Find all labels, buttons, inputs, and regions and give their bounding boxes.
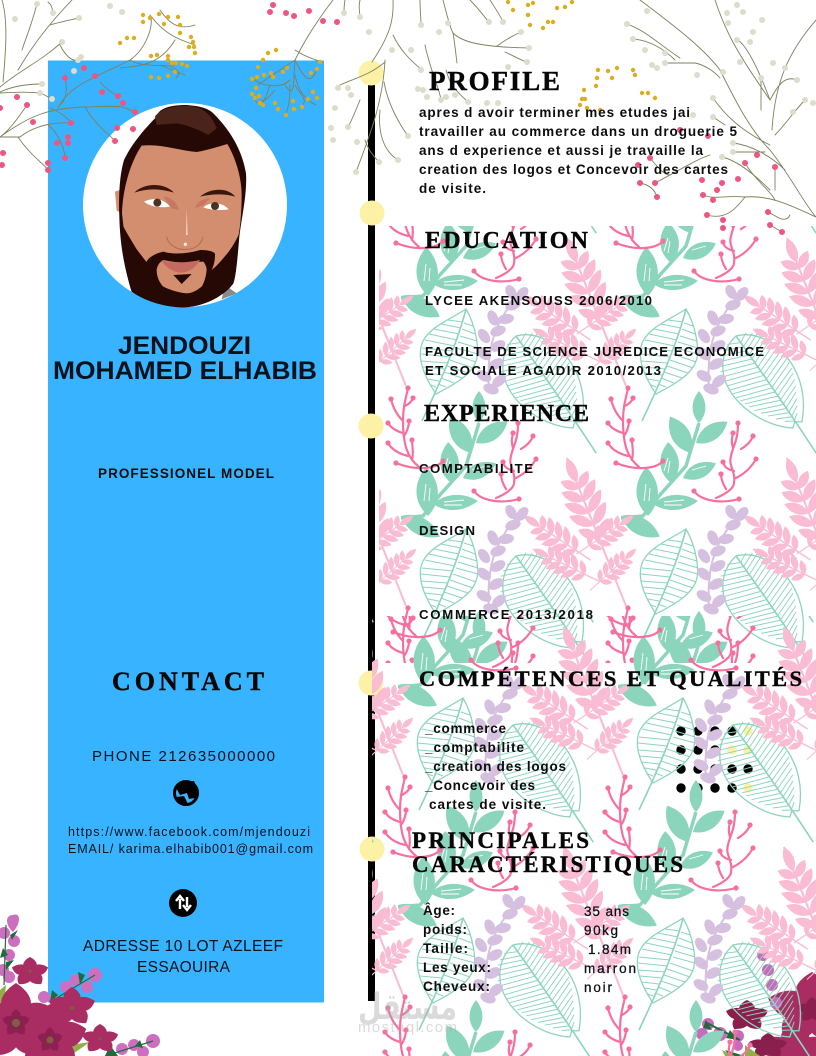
profile text: travailler au commerce dans un droguerie 5 [419, 124, 737, 139]
characteristics labels [423, 903, 491, 994]
contact: phone: PHONE 212635000000 [92, 748, 275, 765]
heading: profile: PROFILE [429, 66, 560, 96]
dot grid decoration [681, 731, 748, 788]
experience entries: COMPTABILITE [419, 461, 533, 476]
contact: address: ADRESSE 10 LOT AZLEEF [83, 938, 283, 955]
skills list [424, 721, 566, 812]
heading: skills: COMPÉTENCES ET QUALITÉS [419, 666, 802, 691]
name: MOHAMED ELHABIB [53, 357, 317, 385]
watermark: مستقل [358, 987, 457, 1028]
heading: key characteristics: CARACTÉRISTIQUES [412, 852, 683, 877]
characteristics labels: poids: [423, 922, 467, 937]
profile text: ans d experience et aussi je travaille la [419, 143, 703, 158]
icon: globe [174, 781, 198, 805]
contact: address [83, 938, 283, 976]
experience entries: DESIGN [419, 523, 475, 538]
watermark [358, 987, 457, 1036]
experience entries: COMMERCE 2013/2018 [419, 607, 593, 622]
profile text [419, 105, 737, 196]
botanical branches: top [0, 0, 816, 232]
characteristics values [584, 904, 636, 995]
portrait photo illustration [83, 103, 287, 307]
heading: contact: CONTACT [112, 667, 264, 696]
heading: key characteristics: PRINCIPALES [412, 828, 589, 853]
skills list: cartes de visite. [429, 797, 546, 812]
characteristics values: 90kg [584, 923, 618, 938]
characteristics labels: Cheveux: [423, 979, 490, 994]
education entries: ET SOCIALE AGADIR 2010/2013 [425, 363, 661, 378]
characteristics labels: Âge: [423, 903, 455, 918]
flowers: bottom left [0, 900, 180, 1056]
heading: key characteristics [412, 828, 683, 877]
skills list: _commerce [424, 721, 506, 736]
panel: blue sidebar [48, 60, 324, 1002]
skills list: _creation des logos [424, 759, 566, 774]
characteristics values: marron [584, 961, 636, 976]
characteristics labels: Taille: [423, 941, 468, 956]
contact: address: ESSAOUIRA [137, 959, 231, 976]
characteristics values: noir [584, 980, 612, 995]
contact: web and email [68, 825, 313, 856]
name: JENDOUZI [118, 332, 251, 360]
education entries: FACULTE DE SCIENCE JUREDICE ECONOMICE [425, 344, 764, 359]
characteristics values: 1.84m [588, 942, 631, 957]
contact: web and email: EMAIL/ karima.elhabib001@gmail.com [68, 842, 313, 856]
watermark: mostaql.com [358, 1019, 457, 1036]
timeline dots [358, 60, 384, 862]
icon: swap arrows [169, 889, 197, 917]
profile text: de visite. [419, 181, 486, 196]
flowers: bottom right [690, 940, 816, 1056]
heading: experience: EXPERIENCE [424, 401, 589, 427]
education entries: LYCEE AKENSOUSS 2006/2010 [425, 293, 652, 308]
skills list: _Concevoir des [424, 778, 535, 793]
floral pattern background: lower [372, 616, 816, 1056]
education entries [425, 293, 764, 378]
name [53, 332, 317, 385]
characteristics labels: Les yeux: [423, 960, 491, 975]
profile text: creation des logos et Concevoir des cartes [419, 162, 728, 177]
timeline bar [368, 85, 375, 1001]
heading: education: EDUCATION [425, 228, 589, 254]
floral pattern background: upper [379, 226, 816, 663]
experience entries [419, 461, 593, 622]
profile text: apres d avoir terminer mes etudes jai [419, 105, 690, 120]
job title: PROFESSIONEL MODEL [98, 466, 274, 481]
skills list: _comptabilite [424, 740, 524, 755]
contact: web and email: https://www.facebook.com/mjendouzi [68, 825, 310, 839]
characteristics values: 35 ans [584, 904, 629, 919]
